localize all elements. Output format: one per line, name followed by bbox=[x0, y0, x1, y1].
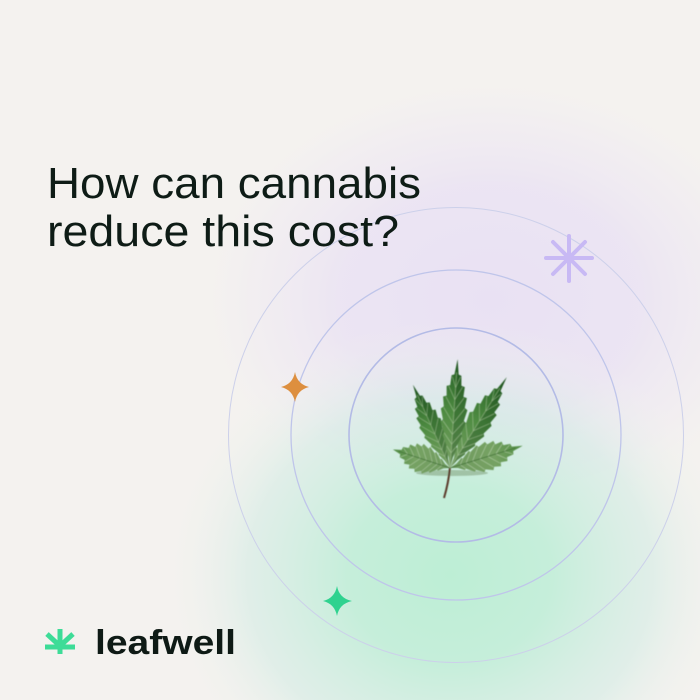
logo bbox=[45, 624, 236, 662]
cannabis leaf bbox=[388, 358, 527, 498]
icon: orange sparkle bbox=[281, 372, 309, 402]
icon: purple asterisk bbox=[546, 236, 592, 281]
heading: reduce this cost? bbox=[47, 207, 399, 256]
lower left leaflet bbox=[388, 435, 455, 482]
upper left leaflet bbox=[402, 380, 461, 473]
lower right leaflet bbox=[446, 432, 527, 482]
icon: green sparkle bbox=[323, 586, 352, 616]
concentric circles bbox=[228, 208, 684, 662]
leaf stem bbox=[444, 467, 450, 498]
logo wordmark: leafwell bbox=[95, 624, 236, 662]
center leaflet bbox=[437, 358, 471, 469]
logo mark bbox=[45, 629, 75, 654]
leaf shadow bbox=[416, 470, 488, 476]
heading: How can cannabis bbox=[47, 159, 421, 208]
upper right leaflet bbox=[439, 370, 518, 475]
heading bbox=[47, 159, 421, 256]
